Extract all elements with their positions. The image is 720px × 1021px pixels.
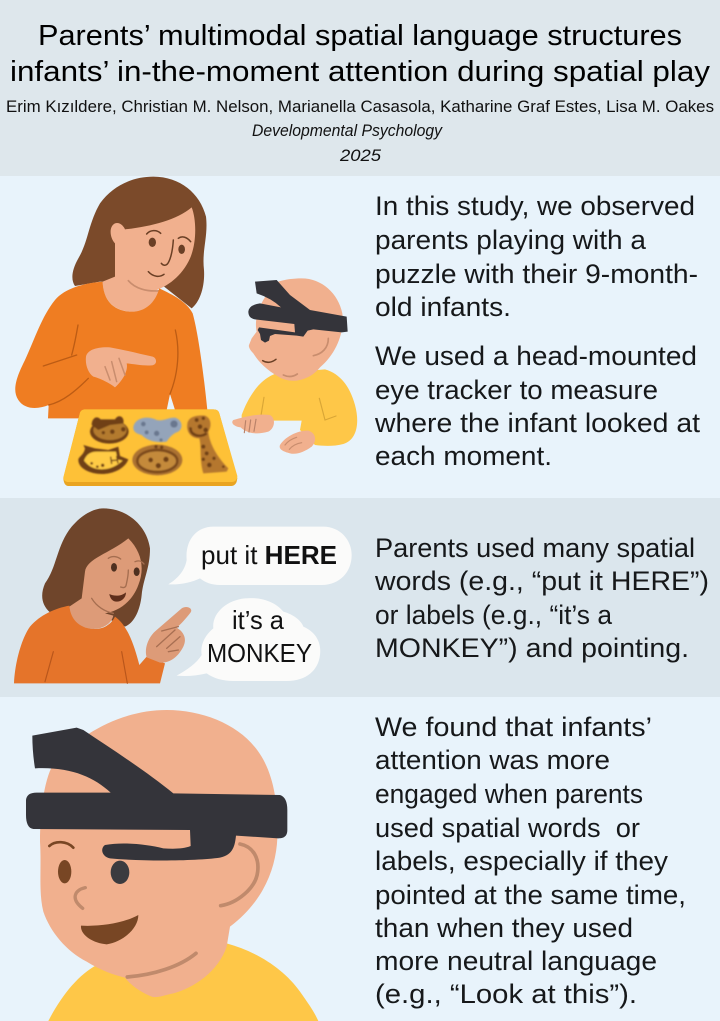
ear [221, 844, 258, 906]
puzzle piece: elephant [133, 418, 182, 442]
panel: header [0, 0, 720, 176]
parent hair [72, 177, 207, 308]
parent sweater [15, 282, 207, 418]
infant head [249, 278, 343, 381]
illustration: infant with eye tracker [26, 710, 318, 1021]
speech bubble: put it HERE [168, 527, 352, 585]
infant other hand [280, 431, 315, 454]
text: study description: each moment. [375, 441, 552, 471]
panel: parent language [0, 498, 720, 697]
eye tracker headset [248, 280, 348, 343]
text: findings description: pointed at the same time, [375, 880, 686, 910]
year: 2025 [339, 146, 382, 165]
head [40, 710, 277, 997]
bubble text: MONKEY: MONKEY [207, 638, 312, 668]
journal: Developmental Psychology [252, 121, 443, 140]
text: parent language description: Parents used many spatial [375, 533, 695, 563]
text: findings description: We found that infants’ [375, 712, 652, 742]
text: study description [374, 191, 701, 471]
text: study description: We used a head-mounted [375, 341, 697, 371]
parent pointing hand [86, 347, 156, 387]
title: Parents’ multimodal spatial language structures [38, 20, 682, 52]
bubble text: put it HERE: put it HERE [201, 540, 337, 570]
infant shirt [242, 369, 357, 446]
text: parent language description: or labels (e.g., “it’s a [375, 600, 613, 630]
title: infants’ in-the-moment attention during spatial play [10, 56, 711, 88]
puzzle piece: bear [90, 416, 129, 444]
puzzle piece: giraffe [187, 416, 228, 473]
text: parent language description [374, 533, 709, 663]
panel: findings [0, 697, 720, 1021]
title [10, 20, 711, 88]
text: findings description: used spatial words or [375, 813, 640, 843]
puzzle piece: cat [78, 445, 128, 474]
eyes [58, 860, 129, 884]
pointing hand [146, 607, 191, 663]
text: study description: old infants. [375, 292, 511, 322]
text: findings description [375, 712, 686, 1009]
text: findings description: labels, especially if they [375, 846, 669, 876]
chin crease [127, 953, 196, 977]
shirt [48, 943, 318, 1021]
text: study description: parents playing with a [375, 225, 647, 255]
text: findings description: engaged when parents [375, 779, 643, 809]
speech bubble: it's a MONKEY [177, 598, 320, 681]
text: findings description: (e.g., “Look at this”). [375, 979, 637, 1009]
text: study description: where the infant looked at [374, 408, 701, 438]
nose [75, 888, 85, 908]
illustration: parent and infant with puzzle [15, 177, 357, 486]
panel: study setup [0, 176, 720, 498]
text: study description: eye tracker to measure [375, 375, 658, 405]
face and neck [69, 538, 142, 629]
authors: Erim Kızıldere, Christian M. Nelson, Marianella Casasola, Katharine Graf Estes, Lisa M. Oakes [6, 97, 714, 116]
text: findings description: more neutral language [375, 946, 657, 976]
text: findings description: than when they used [375, 913, 633, 943]
text: findings description: attention was more [375, 745, 610, 775]
bubble text: it's a: it’s a [232, 605, 285, 635]
eye tracker headset [26, 728, 287, 861]
text: parent language description: MONKEY”) and pointing. [375, 633, 689, 663]
illustration: parent speaking and pointing [14, 508, 352, 683]
puzzle piece: monkey [132, 445, 182, 475]
sweater [14, 606, 165, 683]
text: parent language description: words (e.g., “put it HERE”) [374, 566, 709, 596]
text: study description: puzzle with their 9-month- [375, 259, 698, 289]
infant pointing hand [232, 415, 274, 433]
eyebrow [49, 842, 73, 848]
hair [42, 508, 150, 627]
text: study description: In this study, we observed [375, 191, 695, 221]
parent face and neck [103, 207, 195, 312]
mouth [81, 915, 138, 944]
puzzle tray [63, 409, 237, 486]
